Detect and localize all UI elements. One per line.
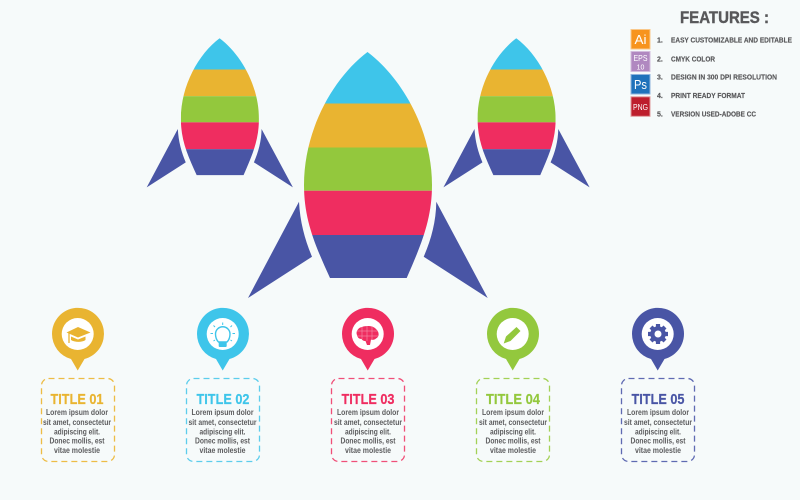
body text: Donec mollis, est — [486, 435, 541, 445]
body text: Lorem ipsum dolor — [46, 407, 109, 417]
body text: Donec mollis, est — [195, 435, 250, 445]
body text: Donec mollis, est — [630, 435, 686, 445]
pin with brain icon — [342, 308, 394, 370]
features list: 5. — [657, 112, 663, 118]
body text: adipiscing elit. — [54, 426, 100, 436]
body text: Lorem ipsum dolor — [337, 407, 400, 417]
body text — [479, 407, 548, 455]
icon: Ps: Ps — [634, 77, 647, 92]
features list: PRINT READY FORMAT — [671, 93, 746, 100]
features list: 4. — [657, 93, 663, 100]
panel: title 05 — [622, 308, 694, 462]
body text: adipiscing elit. — [635, 426, 681, 436]
body text: vitae molestie — [200, 445, 246, 455]
body text: Donec mollis, est — [340, 435, 396, 445]
icon: EPS: 10 — [637, 64, 644, 72]
features list — [657, 38, 792, 118]
right small rocket — [443, 37, 590, 187]
features list: EASY CUSTOMIZABLE AND EDITABLE — [671, 38, 792, 44]
pin with graduation cap icon — [52, 308, 104, 370]
features list: 2. — [657, 56, 663, 64]
heading: TITLE 04 — [486, 391, 541, 408]
body text: Lorem ipsum dolor — [482, 407, 545, 417]
dashed box — [332, 378, 404, 462]
body text: vitae molestie — [490, 445, 536, 455]
heading: TITLE 02 — [196, 391, 250, 408]
features list: 3. — [657, 75, 663, 82]
panel: title 03 — [332, 308, 404, 462]
dashed box — [476, 378, 550, 462]
body text: adipiscing elit. — [200, 426, 246, 436]
body text: adipiscing elit. — [345, 426, 391, 436]
heading: TITLE 05 — [632, 391, 684, 408]
features icons — [631, 30, 650, 116]
body text: sit amet, consectetur — [188, 417, 257, 427]
dashed box — [42, 378, 114, 462]
icon: EPS — [631, 52, 650, 72]
icon: Ai: Ai — [634, 32, 647, 47]
body text: sit amet, consectetur — [479, 417, 548, 427]
body text — [188, 407, 257, 455]
body text: Lorem ipsum dolor — [627, 407, 690, 417]
features heading: FEATURES : — [680, 9, 769, 27]
heading: TITLE 01 — [50, 391, 104, 408]
body text: vitae molestie — [345, 445, 391, 455]
heading: TITLE 03 — [342, 391, 394, 408]
body text — [43, 407, 112, 455]
body text: Donec mollis, est — [50, 435, 105, 445]
body text: vitae molestie — [54, 445, 100, 455]
icon: EPS: EPS — [634, 53, 648, 63]
panel: title 02 — [186, 308, 260, 462]
features list: CMYK COLOR — [671, 56, 715, 64]
body text: sit amet, consectetur — [334, 417, 403, 427]
pin with light bulb icon — [197, 308, 249, 370]
panel: title 01 — [42, 308, 114, 462]
dashed box — [622, 378, 694, 462]
panel: title 04 — [476, 308, 550, 462]
body text — [334, 407, 403, 455]
features list: DESIGN IN 300 DPI RESOLUTION — [671, 75, 777, 82]
body text — [624, 407, 693, 455]
dashed box — [186, 378, 260, 462]
features list: 1. — [657, 38, 663, 44]
left small rocket — [147, 37, 293, 187]
body text: sit amet, consectetur — [624, 417, 693, 427]
pin with gear icon — [632, 308, 684, 370]
body text: Lorem ipsum dolor — [192, 407, 254, 417]
icon: PNG: PNG — [633, 102, 648, 112]
pin with pencil icon — [487, 308, 539, 370]
body text: adipiscing elit. — [490, 426, 536, 436]
body text: sit amet, consectetur — [43, 417, 112, 427]
large centre rocket — [248, 50, 488, 298]
body text: vitae molestie — [635, 445, 681, 455]
features list: VERSION USED-ADOBE CC — [671, 112, 756, 118]
